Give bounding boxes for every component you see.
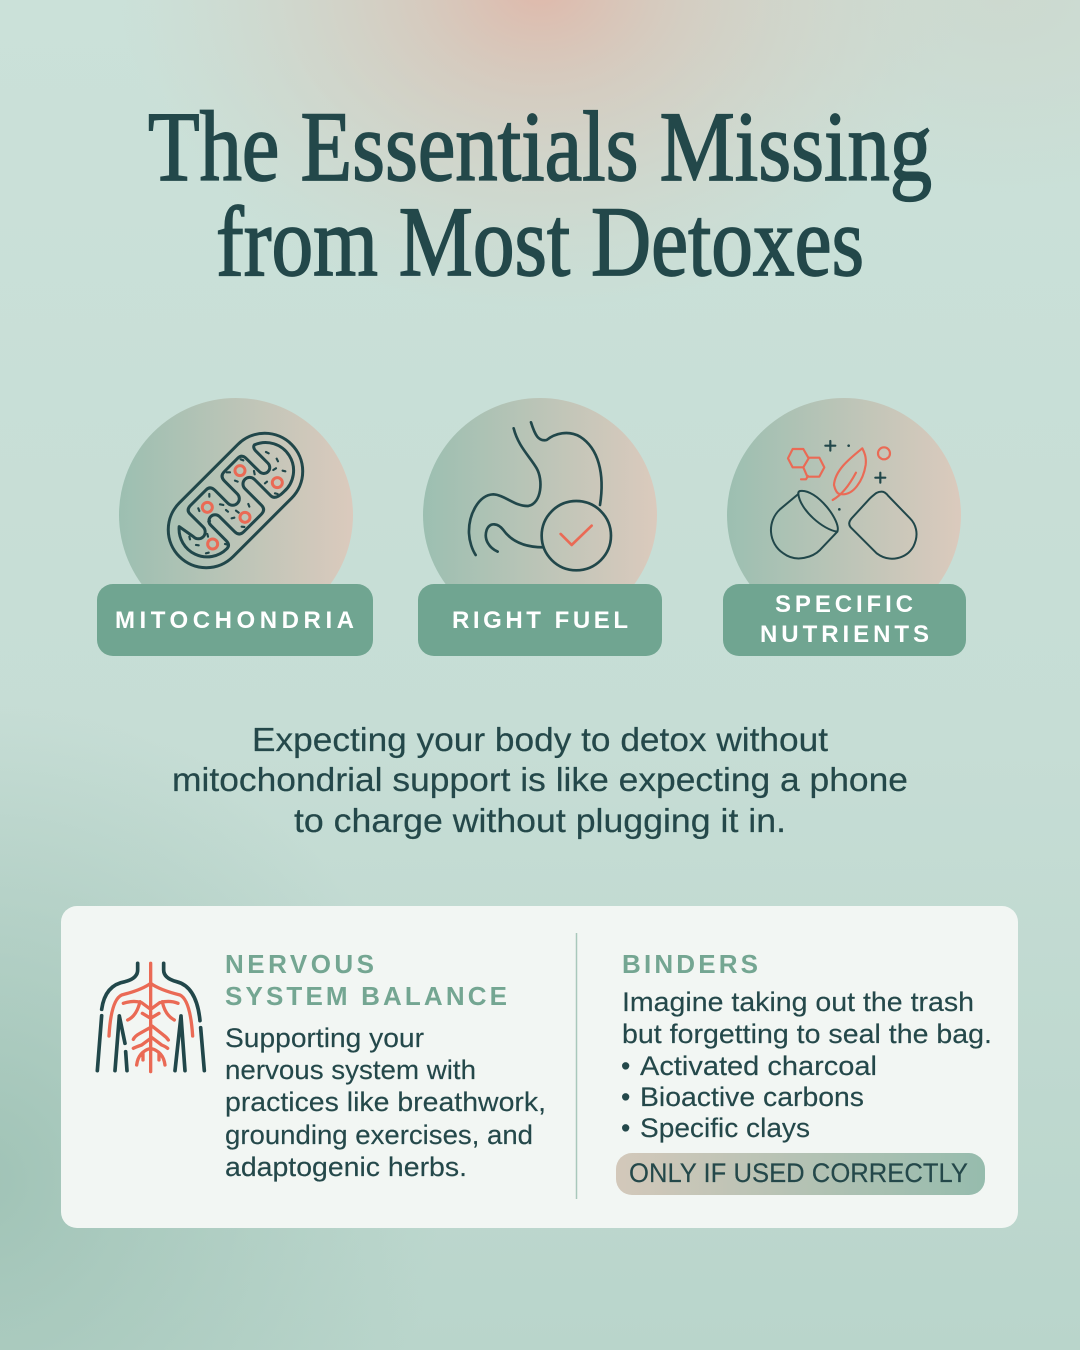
heading: nervous system balance: NERVOUS (225, 949, 374, 979)
label: right fuel (418, 584, 662, 656)
icon: mitochondrion (153, 418, 318, 583)
label: right fuel: RIGHT FUEL (452, 607, 628, 634)
list: binders: • (621, 1113, 630, 1143)
heading: binders: BINDERS (622, 949, 758, 979)
text: nervous system body: Supporting your (225, 1023, 424, 1053)
list: binders: Specific clays (640, 1113, 810, 1143)
list: binders: • (621, 1082, 630, 1112)
list: binders (621, 1051, 877, 1143)
analogy text: to charge without plugging it in. (294, 802, 786, 839)
text: nervous system body: nervous system with (225, 1055, 476, 1085)
icon: nervous system (97, 963, 204, 1072)
text: nervous system body: practices like breathwork, (225, 1087, 546, 1117)
label: specific nutrients: SPECIFIC (775, 591, 913, 618)
text: nervous system body (225, 1023, 546, 1182)
title: The Essentials Missing (148, 91, 932, 202)
icon circle: specific nutrients (727, 398, 961, 632)
list: binders: Activated charcoal (640, 1051, 877, 1081)
label: specific nutrients: NUTRIENTS (760, 621, 929, 648)
text: nervous system body: grounding exercises, and (225, 1120, 533, 1150)
text: binders body: but forgetting to seal the bag. (622, 1019, 992, 1049)
callout: only if used correctly: ONLY IF USED CORRECTLY (629, 1158, 968, 1188)
analogy text (172, 721, 908, 839)
heading: nervous system balance: SYSTEM BALANCE (225, 981, 507, 1011)
text: binders body: Imagine taking out the trash (622, 987, 974, 1017)
heading: nervous system balance (225, 949, 507, 1011)
panel: right fuel (418, 398, 662, 656)
text: nervous system body: adaptogenic herbs. (225, 1152, 467, 1182)
label: mitochondria (97, 584, 373, 656)
panel: mitochondria (97, 398, 373, 656)
label: mitochondria: MITOCHONDRIA (115, 607, 354, 634)
list: binders: • (621, 1051, 630, 1081)
analogy text: mitochondrial support is like expecting a phone (172, 761, 908, 798)
panel: bottom card (61, 906, 1018, 1228)
icon circle: right fuel (423, 398, 657, 632)
text: binders body (622, 987, 992, 1049)
icon circle: mitochondria (119, 398, 353, 632)
icon: capsule, leaf and molecules (771, 441, 917, 559)
panel: specific nutrients (723, 398, 966, 656)
list: binders: Bioactive carbons (640, 1082, 864, 1112)
icon: stomach with check (469, 422, 611, 570)
title: from Most Detoxes (216, 186, 864, 297)
title (148, 91, 932, 297)
label: specific nutrients (723, 584, 966, 656)
analogy text: Expecting your body to detox without (252, 721, 828, 758)
callout: only if used correctly (616, 1153, 985, 1195)
